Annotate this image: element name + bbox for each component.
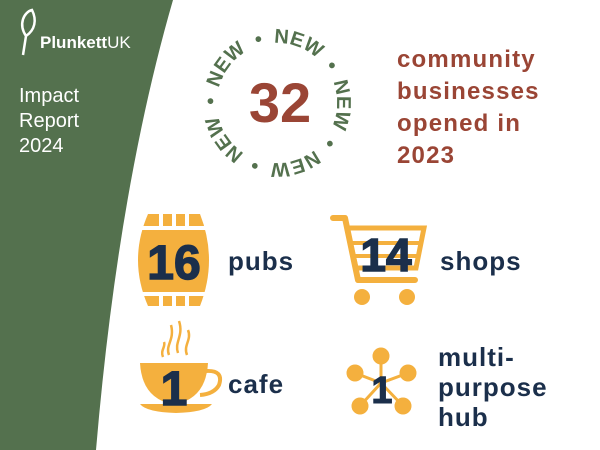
circular NEW badge: NEW — [333, 80, 351, 132]
icon: cart with 14: 14 — [360, 229, 412, 281]
headline text — [397, 46, 540, 169]
icon: barrel with 16 — [134, 214, 214, 306]
icon: coffee cup with 1 — [140, 321, 220, 416]
green side panel — [0, 0, 173, 450]
circular NEW badge: NEW — [271, 150, 321, 177]
icon: barrel with 16: 16 — [147, 237, 201, 290]
big number 32: 32 — [249, 71, 311, 134]
report title — [19, 85, 79, 157]
icon: hub with 1 — [348, 349, 415, 413]
label: multi-purpose hub — [438, 342, 548, 432]
circular NEW badge: NEW — [206, 40, 244, 87]
label: pubs: pubs — [228, 246, 294, 276]
circular NEW badge: • — [208, 98, 214, 104]
headline text: opened in — [397, 110, 521, 137]
circular NEW badge: • — [252, 163, 258, 169]
headline text: 2023 — [397, 142, 455, 169]
circular NEW badge: • — [327, 140, 333, 146]
logo — [22, 10, 131, 55]
circular NEW badge: • — [256, 36, 262, 42]
circular NEW badge — [204, 28, 351, 177]
icon: cart with 14 — [333, 218, 424, 305]
label: multi-purpose hub: hub — [438, 402, 489, 432]
brand name: PlunkettUK — [40, 33, 131, 52]
icon: coffee cup with 1: 1 — [161, 363, 187, 416]
headline text: community — [397, 46, 536, 73]
headline text: businesses — [397, 78, 540, 105]
icon: hub with 1: 1 — [371, 370, 393, 412]
label: multi-purpose hub: purpose — [438, 372, 548, 402]
circular NEW badge: • — [329, 62, 335, 68]
circular NEW badge: NEW — [275, 28, 326, 56]
label: multi-purpose hub: multi- — [438, 342, 515, 372]
circular NEW badge: NEW — [204, 119, 243, 164]
label: shops: shops — [440, 246, 522, 276]
label: cafe: cafe — [228, 369, 284, 399]
report title: Report — [19, 110, 79, 132]
report title: 2024 — [19, 135, 64, 157]
report title: Impact — [19, 85, 79, 107]
icon: leaf — [22, 10, 35, 55]
